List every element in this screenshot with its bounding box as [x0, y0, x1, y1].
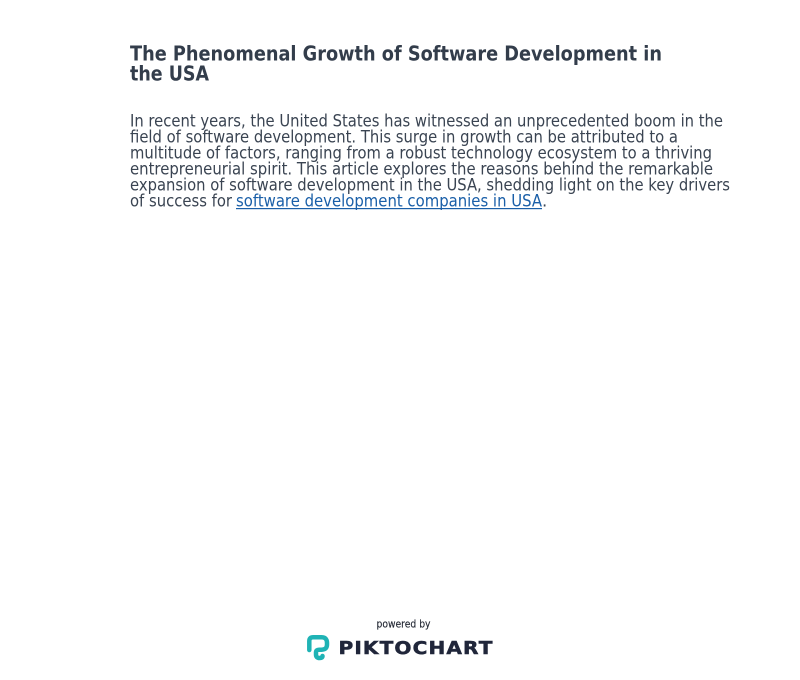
intro paragraph: of success for	[130, 192, 232, 210]
intro paragraph	[130, 112, 730, 210]
intro paragraph: multitude of factors, ranging from a robust technology ecosystem to a thriving	[130, 144, 712, 162]
title	[130, 42, 662, 86]
intro paragraph: expansion of software development in the USA, shedding light on the key drivers	[130, 176, 730, 194]
icon: piktochart logo mark	[309, 637, 327, 658]
title: the USA	[130, 62, 209, 86]
piktochart wordmark: PIKTOCHART	[338, 638, 494, 659]
link: software development companies in USA	[236, 192, 543, 210]
intro paragraph: In recent years, the United States has witnessed an unprecedented boom in the	[130, 112, 723, 130]
title: The Phenomenal Growth of Software Development in	[130, 42, 662, 66]
intro paragraph: .	[542, 192, 547, 210]
intro paragraph: field of software development. This surge in growth can be attributed to a	[130, 128, 678, 146]
powered by label: powered by	[376, 618, 430, 630]
intro paragraph: entrepreneurial spirit. This article explores the reasons behind the remarkable	[130, 160, 713, 178]
